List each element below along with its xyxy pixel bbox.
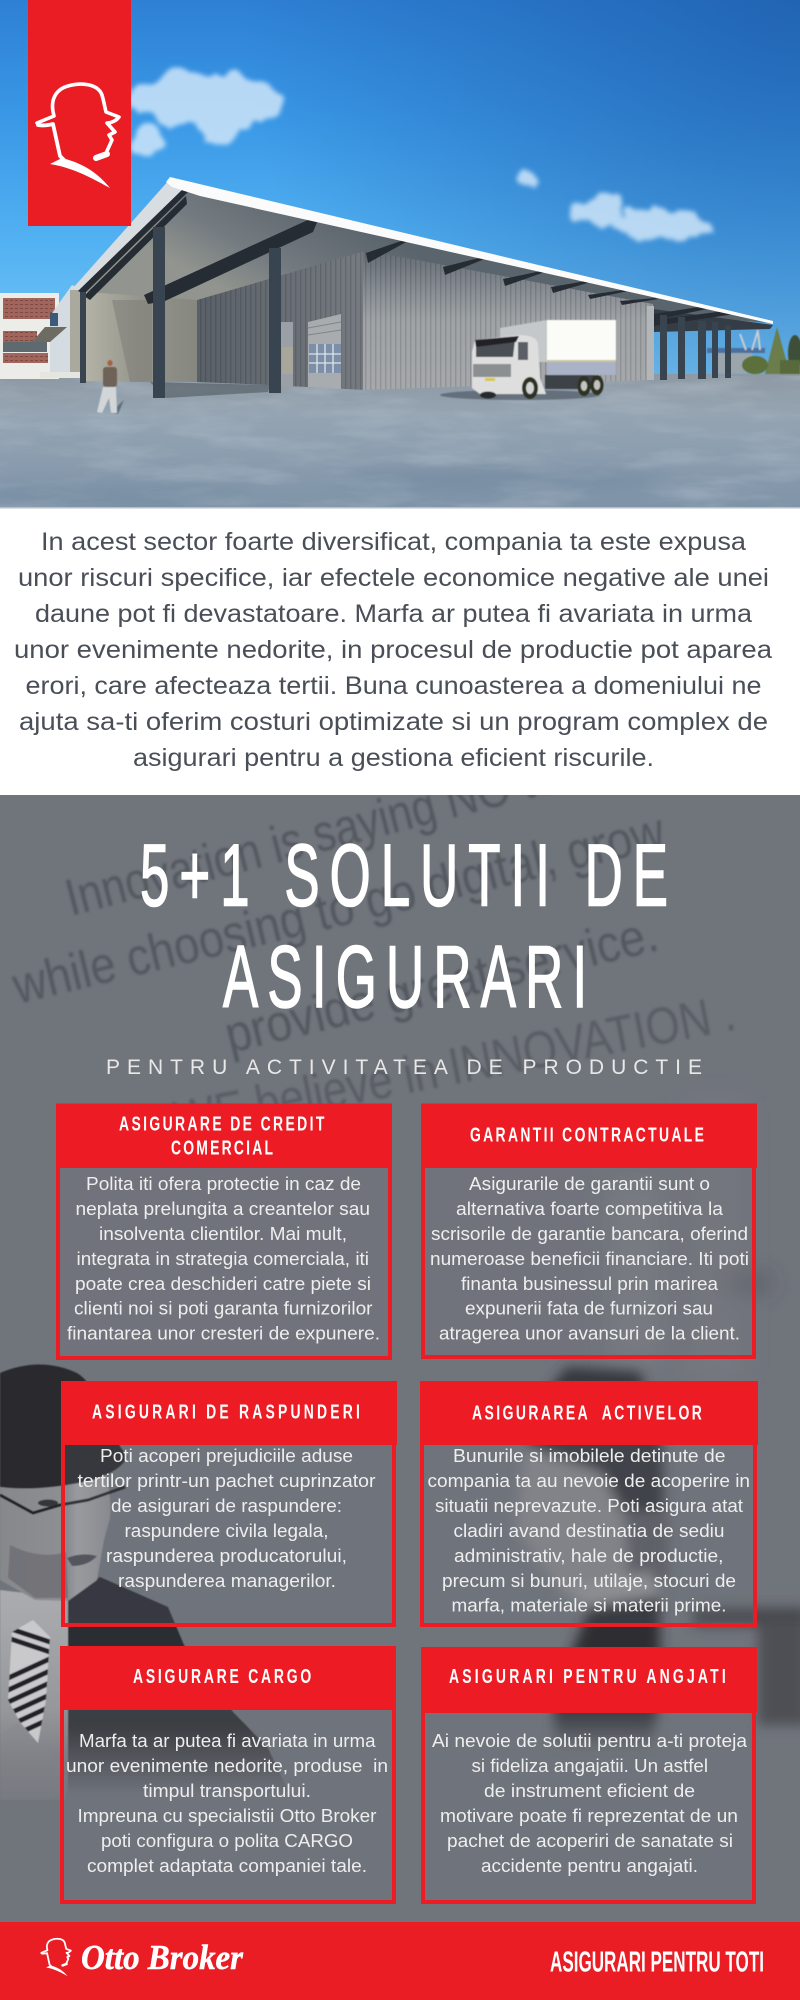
card: asigurarea activelor: precum si bunuri, utilaje, stocuri de: [442, 1571, 736, 1591]
card: garantii contractuale: GARANTII CONTRACTUALE: [470, 1123, 704, 1146]
bowler hat: [0, 1364, 127, 1488]
section subtitle: PENTRU ACTIVITATEA DE PRODUCTIE: [106, 1056, 702, 1079]
card: credit comercial: integrata in strategia comerciala, iti: [76, 1249, 369, 1269]
ground: [0, 374, 800, 508]
shirt: [0, 1590, 68, 1800]
dark photo section background: [0, 746, 800, 1922]
icon: footer logo: [41, 1939, 71, 1976]
section title: 5+1 SOLUTII DE: [140, 827, 668, 925]
section title: [140, 827, 668, 1026]
recess side wall: [197, 251, 365, 390]
second blurred person: [515, 1367, 800, 1750]
card: asigurari de raspunderi: ASIGURARI DE RASPUNDERI: [92, 1400, 360, 1423]
card: garantii contractuale: [421, 1104, 757, 1357]
blurred background lettering: while choosing to go digital, grow: [6, 802, 670, 1016]
card: asigurare cargo: Marfa ta ar putea fi avariata in urma: [79, 1731, 377, 1751]
columns: [80, 227, 731, 398]
card: asigurari de raspunderi: [61, 1381, 397, 1625]
intro paragraph: In acest sector foarte diversificat, compania ta este expusa: [41, 528, 746, 556]
card: asigurare cargo: complet adaptata companiei tale.: [87, 1856, 367, 1876]
cargo box: [500, 320, 547, 362]
card: asigurari pentru angajati: accidente pentru angajati.: [481, 1856, 698, 1876]
dark underside at the far end: [653, 309, 773, 332]
blurred background lettering: [12, 795, 734, 1104]
card: asigurari de raspunderi: raspundere civila legala,: [124, 1521, 328, 1541]
card: asigurari pentru angajati: [421, 1647, 757, 1902]
intro paragraph: [14, 528, 772, 772]
card: credit comercial: neplata prelungita a creantelor sau: [76, 1199, 370, 1219]
card: garantii contractuale: expunerii fata de furnizori sau: [465, 1298, 713, 1318]
card: asigurare cargo: poti configura o polita CARGO: [101, 1831, 353, 1851]
card: asigurarea activelor: [420, 1381, 758, 1625]
soffit: [84, 181, 772, 323]
intro paragraph: erori, care afecteaza tertii. Buna cunoasterea a domeniului ne: [26, 672, 762, 700]
person walking: [97, 360, 124, 414]
card: asigurari pentru angajati: pachet de acoperiri de sanatate si: [447, 1831, 733, 1851]
intro paragraph: unor riscuri specifice, iar efectele economice negative ale unei: [18, 564, 769, 592]
card: asigurare cargo: [60, 1646, 396, 1902]
card: garantii contractuale: scrisorile de garantie bancara, oferind: [431, 1224, 748, 1244]
card: asigurarea activelor: marfa, materiale si materii prime.: [452, 1596, 726, 1616]
card: asigurare cargo: Impreuna cu specialistii Otto Broker: [78, 1806, 376, 1826]
main corrugated wall: [363, 250, 654, 390]
background trees and buildings: [707, 327, 800, 374]
card: asigurare cargo: unor evenimente nedorite, produse in: [66, 1756, 388, 1776]
neighbour brick building: [0, 285, 86, 379]
card: credit comercial: [56, 1104, 392, 1358]
card: garantii contractuale: Asigurarile de garantii sunt o: [469, 1174, 710, 1194]
glasses: [0, 1487, 125, 1513]
card: asigurarea activelor: ASIGURAREA ACTIVELOR: [472, 1401, 702, 1424]
section title: ASIGURARI: [223, 928, 587, 1026]
card: asigurari pentru angajati: de instrument eficient de: [484, 1781, 695, 1801]
intro paragraph: unor evenimente nedorite, in procesul de productie pot aparea: [14, 636, 772, 664]
card: asigurare cargo: ASIGURARE CARGO: [133, 1664, 311, 1688]
blurred background shapes: [749, 1272, 769, 1294]
card: asigurarea activelor: administrativ, hale de productie,: [454, 1546, 724, 1566]
floor shadow: [150, 382, 270, 398]
card: asigurari pentru angajati: si fideliza angajatii. Un astfel: [472, 1756, 708, 1776]
card: asigurarea activelor: compania ta au nevoie de acoperire in: [428, 1471, 750, 1491]
card: credit comercial: poate crea deschideri catre piete si: [75, 1274, 371, 1294]
footer bar: [0, 1922, 800, 2000]
card: asigurari de raspunderi: raspunderea managerilor.: [118, 1571, 336, 1591]
card: garantii contractuale: finanta businessul prin marirea: [461, 1274, 719, 1294]
warehouse: [73, 177, 773, 398]
card: asigurari de raspunderi: de asigurari de raspundere:: [111, 1496, 342, 1516]
clouds: [132, 72, 713, 241]
card: credit comercial: insolventa clientilor. Mai mult,: [99, 1224, 347, 1244]
truck shadow: [440, 390, 600, 400]
card: asigurari de raspunderi: raspunderea producatorului,: [106, 1546, 347, 1566]
roof edge: [166, 177, 773, 324]
icon: man in hat logo: [37, 84, 119, 188]
card: asigurare cargo: timpul transportului.: [143, 1781, 311, 1801]
cab: [472, 335, 546, 394]
card: asigurarea activelor: cladiri avand destinatia de sediu: [454, 1521, 724, 1541]
suit: [66, 1577, 290, 1795]
card: asigurari pentru angajati: ASIGURARI PENTRU ANGJATI: [449, 1664, 726, 1688]
blurred background lettering: Innovation is saying NO to: [60, 746, 563, 928]
card: asigurarea activelor: situatii neprevazute. Poti asigura atat: [435, 1496, 743, 1516]
hero photo: warehouse: [0, 0, 800, 508]
wheels: [480, 375, 604, 399]
recess back wall: [86, 292, 197, 382]
red banner with logo: [28, 0, 131, 226]
intro paragraph: asigurari pentru a gestiona eficient riscurile.: [133, 744, 654, 772]
card: credit comercial: COMERCIAL: [171, 1136, 273, 1159]
footer brand name: Otto Broker: [81, 1938, 243, 1977]
soffit beams: [78, 188, 735, 326]
document in hand: [0, 1723, 66, 1800]
card: credit comercial: finantarea unor cresteri de expunere.: [67, 1324, 380, 1344]
blurred background lettering: provide great service.: [219, 905, 664, 1065]
card: garantii contractuale: alternativa foarte competitiva la: [456, 1199, 724, 1219]
sky: [0, 0, 800, 395]
tie: [8, 1620, 50, 1743]
card: credit comercial: Polita iti ofera protectie in caz de: [86, 1174, 361, 1194]
card: credit comercial: clienti noi si poti garanta furnizorilor: [74, 1298, 373, 1318]
intro paragraph: daune pot fi devastatoare. Marfa ar putea fi avariata in urma: [35, 600, 752, 628]
roller doors: [281, 314, 341, 389]
truck: [440, 320, 616, 400]
man with bowler hat: [0, 1364, 290, 1800]
card: asigurari de raspunderi: Poti acoperi prejudiciile aduse: [100, 1446, 353, 1466]
card: credit comercial: ASIGURARE DE CREDIT: [119, 1112, 325, 1135]
neck and face: [0, 1470, 110, 1601]
card: asigurari pentru angajati: motivare poate fi reprezentat de un: [440, 1806, 738, 1826]
card: asigurari pentru angajati: Ai nevoie de solutii pentru a-ti proteja: [432, 1731, 748, 1751]
card: garantii contractuale: numeroase beneficii financiare. Iti poti: [430, 1249, 749, 1269]
card: asigurari de raspunderi: tertilor printr-un pachet cuprinzator: [78, 1471, 376, 1491]
card: garantii contractuale: atragerea unor avansuri de la client.: [439, 1324, 740, 1344]
card: asigurarea activelor: Bunurile si imobilele detinute de: [453, 1446, 726, 1466]
intro paragraph: ajuta sa-ti oferim costuri optimizate si un program complex de: [19, 708, 768, 736]
